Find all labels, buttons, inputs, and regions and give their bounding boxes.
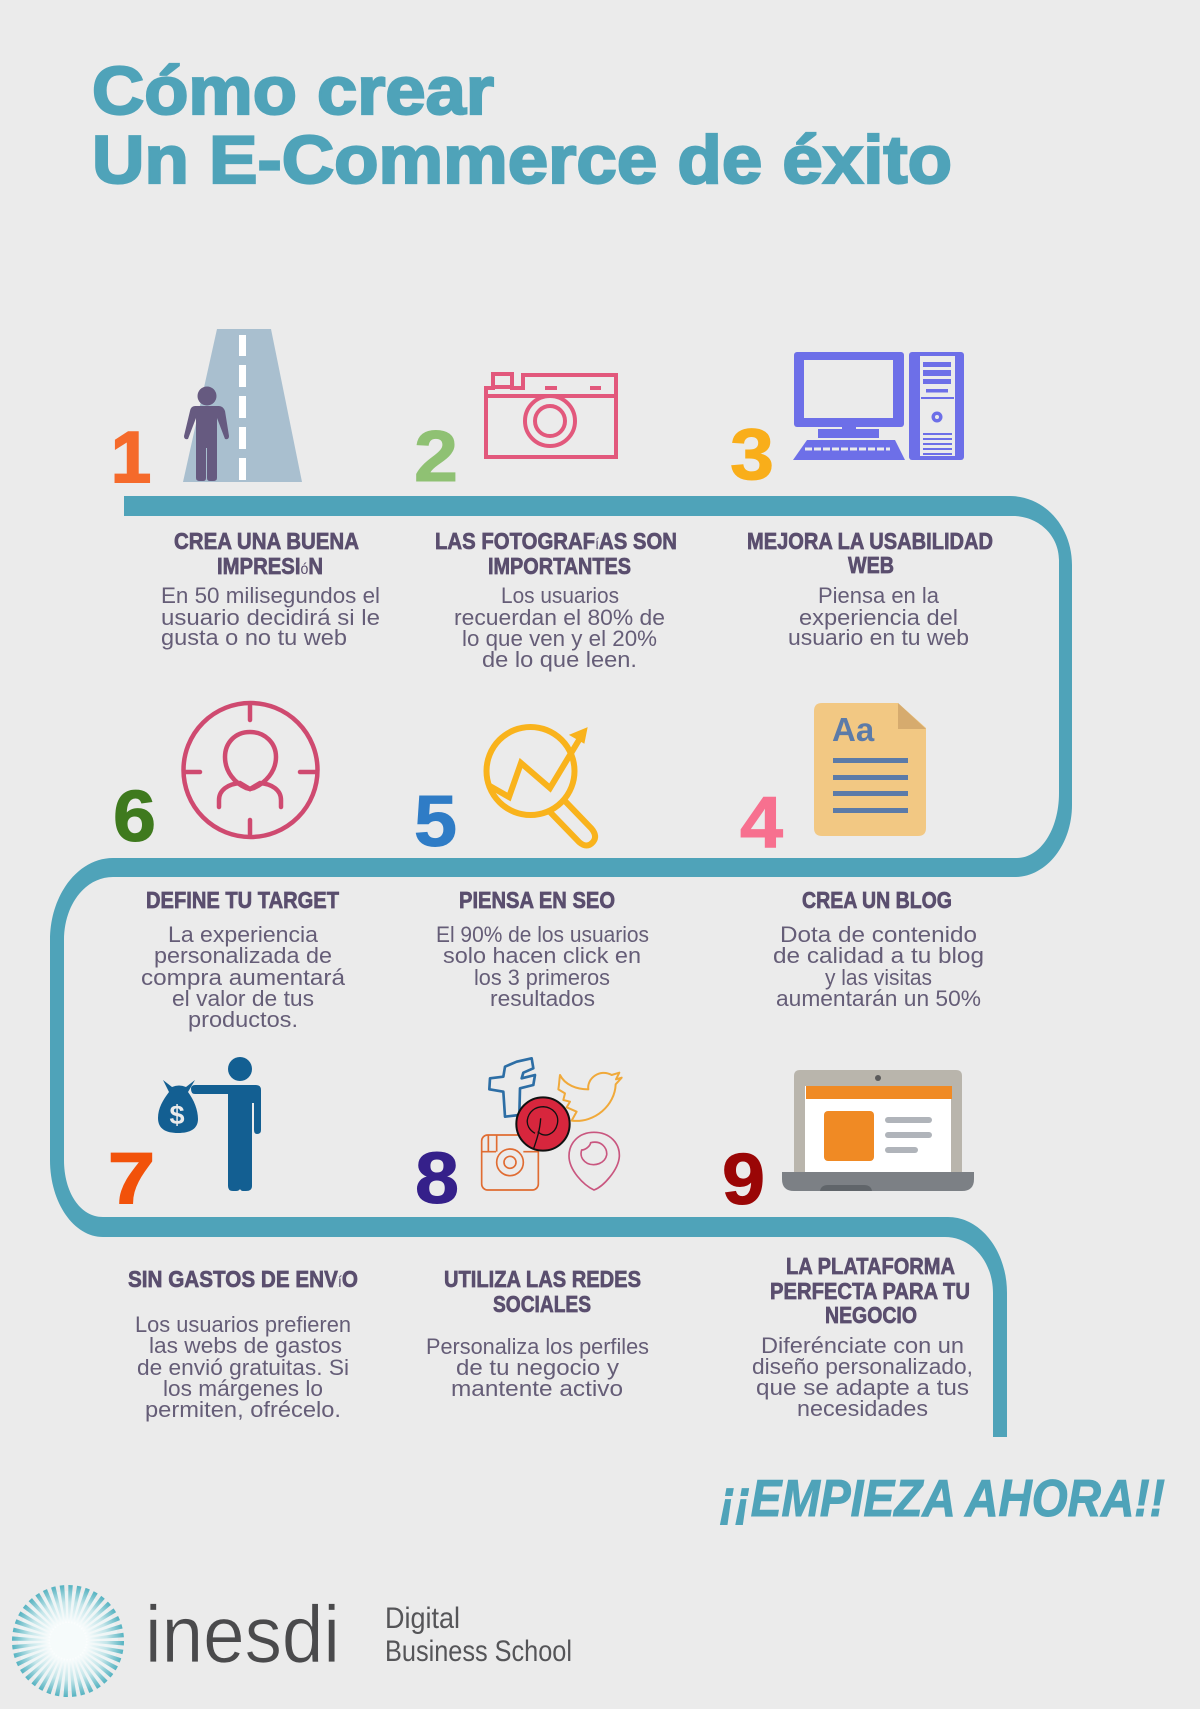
heading: DEFINE TU TARGET xyxy=(146,887,339,913)
icon: person holding money bag xyxy=(158,1057,261,1191)
number 5: 5 xyxy=(414,782,457,862)
icon: periscope xyxy=(569,1132,619,1190)
heading: IMPORTANTES xyxy=(488,553,631,579)
body text: que se adapte a tus xyxy=(756,1375,969,1400)
step 7: free shipping xyxy=(108,1057,358,1422)
icon: magnifier with growth arrow xyxy=(486,727,595,846)
title: Un E-Commerce de éxito xyxy=(92,122,952,198)
icon: twitter xyxy=(558,1073,622,1121)
step 9: platform xyxy=(722,1070,974,1421)
icon: desktop computer xyxy=(793,352,964,460)
heading: MEJORA LA USABILIDAD xyxy=(747,528,993,554)
body text xyxy=(141,922,346,1032)
icon: facebook xyxy=(489,1058,535,1117)
body text xyxy=(135,1312,351,1422)
body text: Dota de contenido xyxy=(780,922,977,947)
icon: document xyxy=(814,703,926,836)
body text: lo que ven y el 20% xyxy=(462,626,657,651)
number 7: 7 xyxy=(108,1139,155,1219)
icon: camera xyxy=(486,374,616,457)
body text: usuario en tu web xyxy=(788,625,969,650)
number 2: 2 xyxy=(414,417,458,497)
heading: LAS FOTOGRAFíAS SON xyxy=(435,528,677,554)
heading: SIN GASTOS DE ENVíO xyxy=(128,1266,358,1292)
body text: y las visitas xyxy=(825,965,932,990)
icon: road and person xyxy=(183,329,302,482)
body text: las webs de gastos xyxy=(149,1333,342,1358)
body text: los 3 primeros xyxy=(474,965,610,990)
step 3: usability xyxy=(730,352,993,650)
body text xyxy=(161,583,380,650)
heading: UTILIZA LAS REDES xyxy=(444,1266,641,1292)
icon: pinterest xyxy=(516,1097,570,1151)
body text: Los usuarios xyxy=(501,583,619,608)
step 4: blog xyxy=(740,703,984,1011)
body text: gusta o no tu web xyxy=(161,625,347,650)
body text: de tu negocio y xyxy=(456,1355,620,1380)
body text xyxy=(454,583,665,672)
icon: target on person xyxy=(184,703,318,837)
body text: aumentarán un 50% xyxy=(776,986,981,1011)
heading: SOCIALES xyxy=(493,1291,591,1317)
heading: NEGOCIO xyxy=(825,1302,917,1328)
body text: de lo que leen. xyxy=(482,647,637,672)
body text: experiencia del xyxy=(799,605,958,630)
body text xyxy=(426,1334,649,1401)
body text: usuario decidirá si le xyxy=(161,605,380,630)
body text: compra aumentará xyxy=(141,965,346,990)
body text: diseño personalizado, xyxy=(752,1354,973,1379)
number 4: 4 xyxy=(740,783,783,863)
heading xyxy=(444,1266,641,1317)
heading: IMPRESIóN xyxy=(217,553,323,579)
body text: de calidad a tu blog xyxy=(773,943,984,968)
heading: CREA UNA BUENA xyxy=(174,528,359,554)
number 3: 3 xyxy=(730,415,774,495)
step 5: SEO xyxy=(414,727,649,1011)
icon: instagram xyxy=(482,1135,538,1190)
heading xyxy=(770,1253,970,1328)
logo tagline: Digital xyxy=(385,1602,460,1635)
icon: radial sunburst xyxy=(18,1591,118,1691)
heading: LA PLATAFORMA xyxy=(786,1253,955,1279)
body text: Diferénciate con un xyxy=(761,1333,964,1358)
icon: document: Aa xyxy=(832,711,875,748)
step 2: photographs xyxy=(414,374,677,672)
icon: person holding money bag: $ xyxy=(169,1100,185,1130)
logo tagline: Business School xyxy=(385,1635,572,1668)
body text: recuerdan el 80% de xyxy=(454,605,665,630)
step 8: social networks xyxy=(415,1058,649,1401)
body text: mantente activo xyxy=(451,1376,623,1401)
body text: permiten, ofrécelo. xyxy=(145,1397,341,1422)
body text: de envió gratuitas. Si xyxy=(137,1355,349,1380)
logo tagline xyxy=(385,1602,572,1668)
icon: social network logos xyxy=(482,1058,622,1190)
heading xyxy=(174,528,359,579)
heading: PERFECTA PARA TU xyxy=(770,1278,970,1304)
number 1: 1 xyxy=(111,418,151,498)
number 9: 9 xyxy=(722,1140,765,1220)
body text: solo hacen click en xyxy=(443,943,641,968)
body text: La experiencia xyxy=(168,922,318,947)
body text: Personaliza los perfiles xyxy=(426,1334,649,1359)
heading xyxy=(747,528,993,578)
title: Cómo crear xyxy=(92,53,494,129)
body text xyxy=(788,583,969,650)
heading: PIENSA EN SEO xyxy=(459,887,615,913)
heading: WEB xyxy=(848,552,894,578)
logo wordmark: inesdi xyxy=(145,1590,340,1680)
body text: Piensa en la xyxy=(818,583,939,608)
body text xyxy=(752,1333,973,1421)
icon: laptop xyxy=(782,1070,974,1191)
heading xyxy=(435,528,677,579)
winding path connector xyxy=(50,496,1072,1437)
step 1: first impression xyxy=(111,329,380,650)
body text: Los usuarios prefieren xyxy=(135,1312,351,1337)
heading: CREA UN BLOG xyxy=(802,887,952,913)
body text: los márgenes lo xyxy=(163,1376,323,1401)
body text: En 50 milisegundos el xyxy=(161,583,380,608)
body text: necesidades xyxy=(797,1396,928,1421)
number 8: 8 xyxy=(415,1139,459,1219)
body text: personalizada de xyxy=(154,943,332,968)
step 6: target xyxy=(113,703,346,1032)
logo: inesdi xyxy=(18,1590,572,1691)
body text: el valor de tus xyxy=(172,986,314,1011)
number 6: 6 xyxy=(113,777,156,857)
body text: productos. xyxy=(188,1007,298,1032)
body text xyxy=(773,922,984,1011)
body text: El 90% de los usuarios xyxy=(436,922,649,947)
title xyxy=(92,53,952,198)
body text: resultados xyxy=(490,986,595,1011)
body text xyxy=(436,922,649,1011)
